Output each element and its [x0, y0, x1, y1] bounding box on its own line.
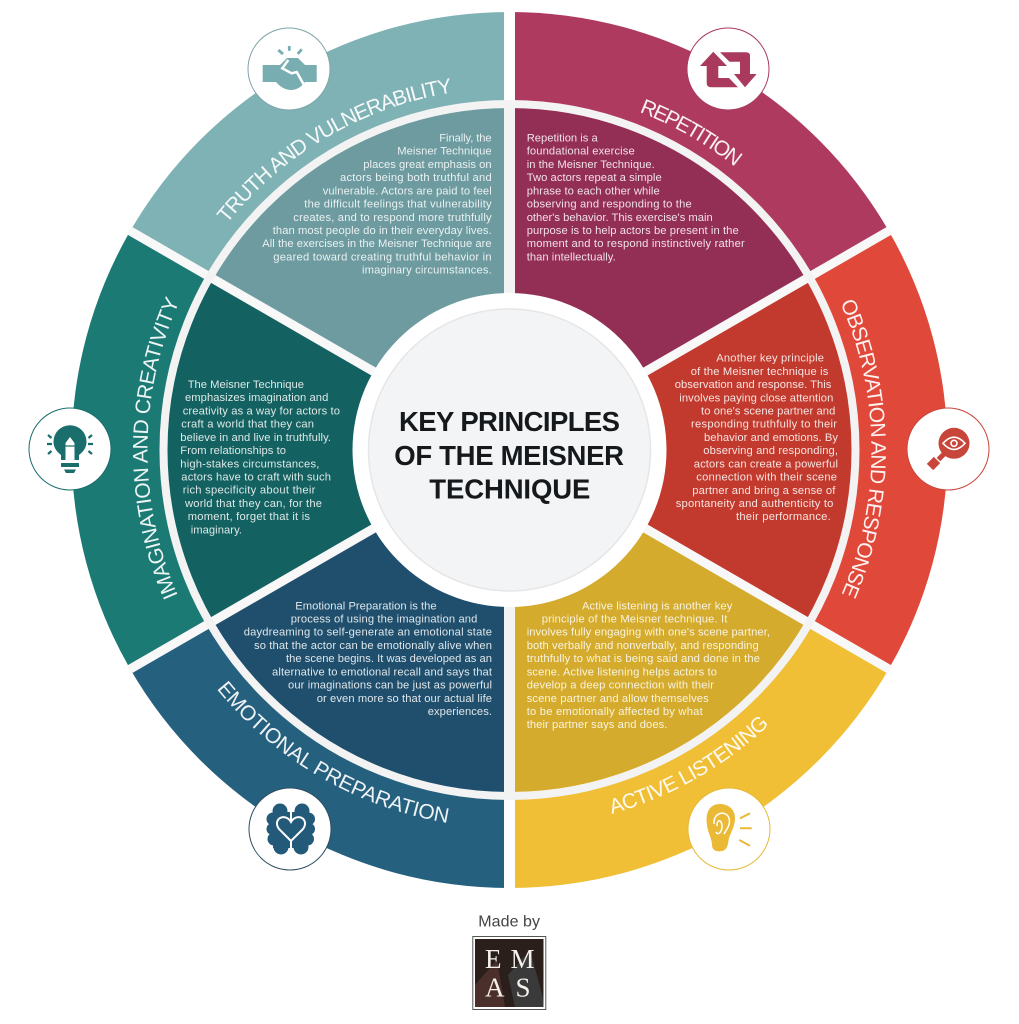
text block: truth — [262, 132, 492, 277]
heading: active listening: ACTIVE LISTENING — [612, 717, 767, 814]
icon: brain with heart — [249, 788, 331, 870]
text block: truth: the difficult feelings that vulnerability — [304, 199, 492, 211]
text block: truth: Meisner Technique — [397, 146, 492, 158]
text block: observation: to one's scene partner and — [701, 406, 835, 418]
text block: imagination: high-stakes circumstances, — [180, 458, 319, 470]
outer band: emotional preparation — [130, 450, 509, 888]
inner sector: imagination — [167, 279, 510, 621]
text block: imagination: craft a world that they can — [181, 419, 314, 431]
title: KEY PRINCIPLES — [399, 406, 620, 437]
inner sector: repetition — [510, 108, 806, 450]
text block: emotional preparation: or even more so that our actual life — [317, 693, 492, 705]
text block: imagination: moment, forget that it is — [188, 511, 310, 523]
text block: truth: creates, and to respond more truthfully — [293, 212, 492, 224]
text block: repetition: observing and responding to the — [527, 199, 692, 211]
text block: emotional preparation: experiences. — [428, 706, 492, 718]
text block: imagination: world that they can, for the — [184, 498, 322, 510]
title: TECHNIQUE — [429, 473, 590, 504]
text block: repetition: purpose is to help actors be present in the — [527, 225, 739, 237]
text block: repetition: other's behavior. This exercise's main — [527, 212, 713, 224]
icon: light bulb with pencil — [29, 408, 111, 490]
text block: observation: of the Meisner technique is — [691, 366, 829, 378]
logo: EMAS: A — [485, 973, 505, 1003]
text block: truth: places great emphasis on — [363, 159, 492, 171]
heading: truth: TRUTH AND VULNERABILITY — [216, 78, 450, 220]
text block: repetition — [527, 132, 745, 263]
text block: observation: observing and responding, — [703, 445, 838, 457]
text block: truth: All the exercises in the Meisner Technique are — [262, 238, 492, 250]
logo: EMAS: M — [510, 944, 535, 974]
center hub — [352, 293, 666, 607]
inner sector: active listening — [510, 450, 806, 792]
text block: active listening: scene partner and allow themselves — [527, 693, 709, 705]
text block: active listening: their partner says and does. — [527, 719, 667, 731]
text block: active listening: scene. Active listening helps actors to — [527, 666, 717, 678]
outer band: observation — [510, 231, 947, 669]
text block: emotional preparation: daydreaming to self-generate an emotional state — [244, 627, 492, 639]
text block: active listening — [527, 600, 770, 731]
text block: observation: connection with their scene — [696, 472, 837, 484]
text block: observation — [675, 353, 838, 523]
text block: imagination: believe in and live in truthfully. — [180, 432, 331, 444]
text block: emotional preparation: so that the actor can be emotionally alive when — [254, 640, 492, 652]
logo: EMAS: S — [516, 973, 531, 1003]
icon: ear with sound lines — [688, 788, 770, 870]
outer band: imagination — [72, 231, 510, 669]
outer band: repetition — [510, 12, 889, 450]
heading: imagination: IMAGINATION AND CREATIVITY — [132, 296, 178, 600]
inner sector: truth — [213, 108, 510, 450]
heading: repetition: REPETITION — [640, 99, 742, 166]
text block: truth: than most people do in their everyday lives. — [273, 225, 492, 237]
panel: repetition — [515, 12, 886, 368]
text block: active listening: to be emotionally affected by what — [527, 706, 704, 718]
text block: truth: actors being both truthful and — [340, 172, 492, 184]
panel: truth and vulnerability — [132, 12, 504, 368]
credit: made by: Made by — [478, 914, 540, 931]
text block: repetition: moment and to respond instinctively rather — [527, 238, 745, 250]
panel: emotional preparation — [132, 532, 504, 888]
text block: active listening: Active listening is another key — [582, 600, 733, 612]
icon: handshake — [248, 28, 330, 110]
inner sector: observation — [510, 279, 852, 621]
text block: truth: vulnerable. Actors are paid to feel — [323, 185, 492, 197]
text block: repetition: Repetition is a — [527, 132, 598, 144]
text block: imagination: actors have to craft with such — [181, 472, 331, 484]
text block: observation: behavior and emotions. By — [704, 432, 838, 444]
text block: active listening: involves fully engaging with one's scene partner, — [527, 627, 770, 639]
text block: active listening: truthfully to what is being said and done in the — [527, 653, 760, 665]
logo: EMAS — [473, 936, 546, 1010]
logo: EMAS: E — [485, 944, 502, 974]
text block: imagination: imaginary. — [191, 524, 242, 536]
panel: observation and response — [648, 235, 990, 665]
text block: emotional preparation: Emotional Preparation is the — [295, 600, 437, 612]
text block: imagination: creativity as a way for actors to — [183, 405, 340, 417]
panel: active listening — [515, 532, 886, 888]
icon: repeat arrows — [687, 28, 769, 110]
title: OF THE MEISNER — [394, 440, 624, 471]
text block: observation: observation and response. This — [675, 379, 832, 391]
text block: imagination: From relationships to — [180, 445, 286, 457]
text block: emotional preparation: alternative to emotional recall and says that — [272, 666, 493, 678]
text block: emotional preparation: process of using the imagination and — [291, 614, 477, 626]
outer band: truth — [130, 12, 509, 450]
text block: active listening: both verbally and nonverbally, and responding — [527, 640, 759, 652]
text block: observation: involves paying close attention — [679, 392, 833, 404]
inner sector: emotional preparation — [213, 450, 510, 792]
text block: observation: spontaneity and authenticity to — [676, 498, 833, 510]
icon: magnifier with eye — [907, 408, 989, 490]
text block: repetition: foundational exercise — [527, 146, 635, 158]
text block: observation: Another key principle — [716, 353, 824, 365]
text block: emotional preparation: the scene begins. It was developed as an — [286, 653, 492, 665]
text block: repetition: Two actors repeat a simple — [527, 172, 662, 184]
text block: repetition: in the Meisner Technique. — [527, 159, 655, 171]
text block: imagination — [180, 379, 340, 536]
text block: observation: responding truthfully to their — [691, 419, 837, 431]
panel: imagination and creativity — [28, 235, 372, 665]
text block: active listening: principle of the Meisner technique. It — [542, 614, 728, 626]
text block: emotional preparation: our imaginations can be just as powerful — [288, 680, 492, 692]
text block: active listening: develop a deep connection with their — [527, 680, 714, 692]
text block: truth: Finally, the — [439, 132, 492, 144]
text block: truth: geared toward creating truthful behavior in — [273, 251, 492, 263]
heading: observation: OBSERVATION AND RESPONSE — [842, 300, 886, 599]
text block: imagination: emphasizes imagination and — [185, 392, 328, 404]
text block: observation: partner and bring a sense of — [692, 485, 836, 497]
text block: truth: imaginary circumstances. — [362, 265, 492, 277]
text block: observation: actors can create a powerful — [694, 458, 838, 470]
heading: emotional preparation: EMOTIONAL PREPARATION — [218, 680, 449, 823]
title — [394, 406, 624, 504]
text block: observation: their performance. — [736, 511, 831, 523]
text block: repetition: phrase to each other while — [527, 185, 660, 197]
text block: imagination: The Meisner Technique — [188, 379, 304, 391]
outer band: active listening — [510, 450, 889, 888]
text block: emotional preparation — [244, 600, 493, 718]
text block: imagination: rich specificity about their — [183, 485, 316, 497]
text block: repetition: than intellectually. — [527, 251, 616, 263]
